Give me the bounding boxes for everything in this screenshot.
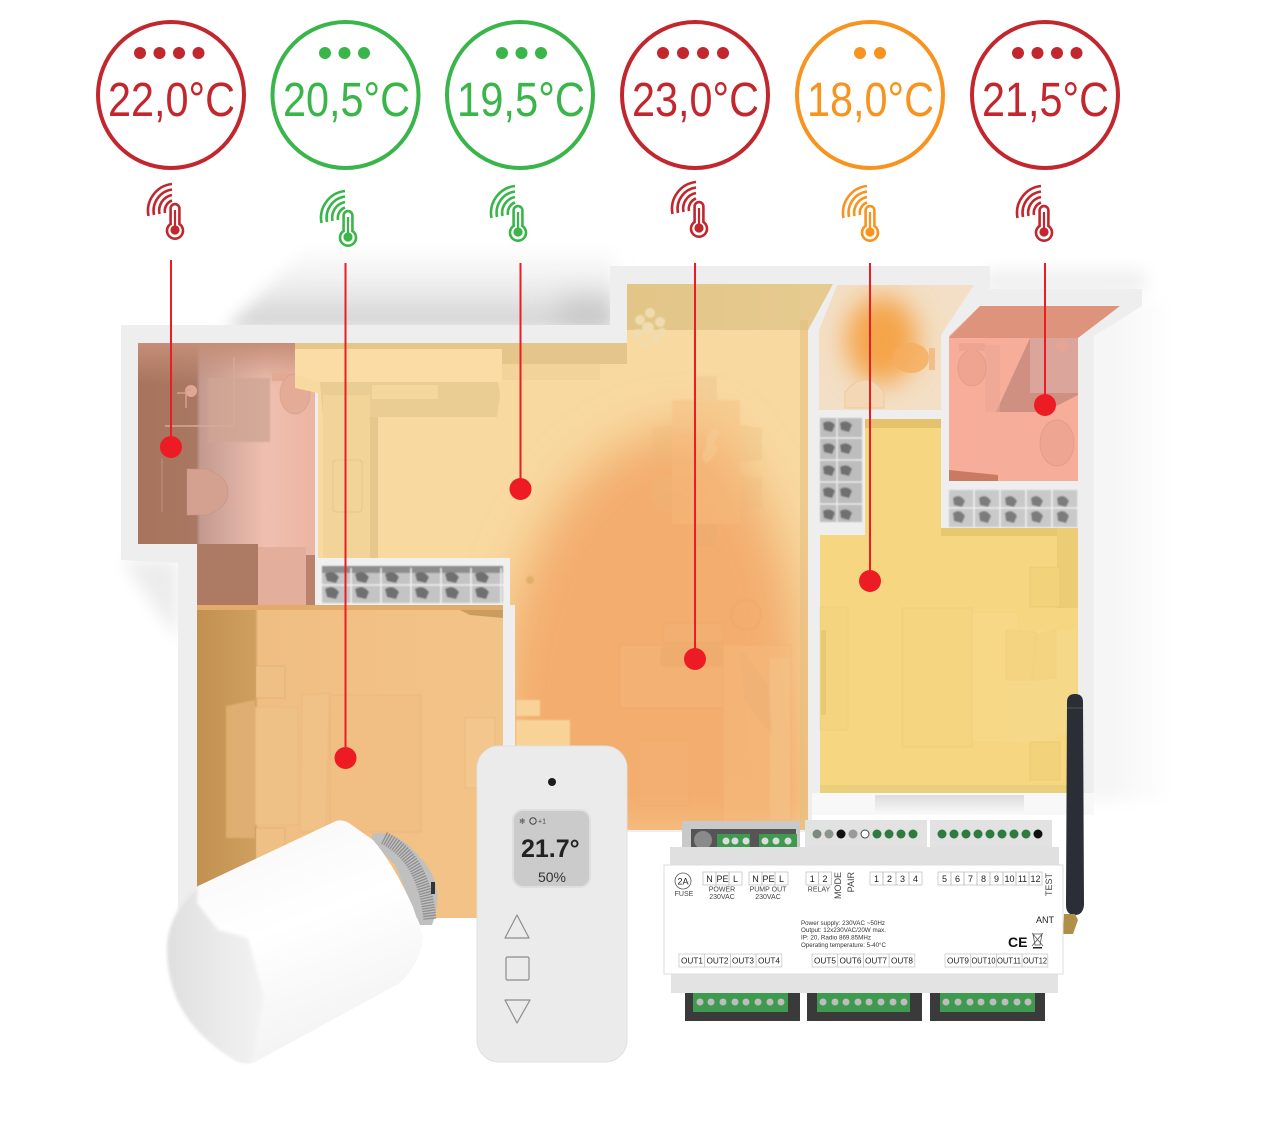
dining table [672, 376, 761, 464]
upper left terminals [682, 821, 800, 849]
ANT label and marks: ANT [1036, 915, 1055, 925]
room: wardrobe right [949, 490, 1078, 527]
ANT label and marks: CE [1008, 934, 1027, 950]
pointer line [684, 263, 706, 670]
indicator LEDs group 1 [805, 820, 927, 847]
power terminals: N [706, 874, 713, 884]
button: select [506, 957, 529, 980]
heat zone [495, 427, 815, 840]
front label plate [664, 865, 1063, 974]
temperature badge [447, 22, 593, 168]
power terminals: POWER [709, 886, 735, 894]
relay, mode, pair: PAIR [846, 872, 856, 892]
output terminals: OUT2 [706, 956, 729, 966]
output terminals: OUT6 [840, 956, 862, 966]
zone 3 reading [447, 22, 593, 500]
zone 2 reading [272, 22, 418, 769]
outer walls [121, 266, 1142, 918]
room: left bathroom [138, 343, 315, 605]
power terminals: 230VAC [709, 894, 735, 901]
button: up [505, 915, 529, 938]
output terminals: OUT7 [865, 956, 888, 966]
remote body [477, 746, 627, 1062]
power terminals: PE [716, 874, 729, 884]
plant [633, 308, 666, 349]
output terminals: OUT11 [997, 956, 1022, 966]
wiring controller [664, 694, 1084, 1021]
zone terminals: 12 [1030, 874, 1041, 884]
room: kitchen and living [295, 284, 833, 840]
zone terminals: 10 [1004, 874, 1015, 884]
display: +1 [538, 818, 546, 826]
temperature badge: 19,5°C [457, 74, 585, 127]
fuse label [675, 873, 694, 898]
building shadow [122, 245, 1175, 800]
zone terminals: 7 [968, 874, 973, 884]
pointer line [859, 263, 881, 592]
thermostat body [167, 820, 423, 1063]
bed [902, 608, 1076, 747]
thermostat end cap [167, 886, 264, 1063]
room: right bedroom [820, 419, 1078, 793]
icon: wireless thermometer [321, 191, 356, 246]
balcony threshold [812, 793, 1094, 815]
pump terminals: L [779, 874, 784, 884]
icon: wireless thermometer [843, 186, 878, 241]
zone terminals: 1 [874, 874, 879, 884]
output terminals [679, 954, 1048, 967]
zone terminals: 6 [955, 874, 960, 884]
zone terminals: 4 [913, 874, 918, 884]
zone terminals: 2 [887, 874, 892, 884]
zone terminals: 5 [942, 874, 947, 884]
specifications text [801, 921, 887, 949]
icon: wireless thermometer [1017, 186, 1052, 241]
display [513, 810, 590, 887]
pump terminals [749, 872, 788, 901]
output terminals: OUT12 [1023, 956, 1048, 966]
output terminals: OUT5 [814, 956, 837, 966]
pump terminals: N [752, 874, 759, 884]
output terminals: OUT4 [758, 956, 781, 966]
rug and sofa [526, 576, 791, 822]
power terminals [703, 872, 742, 901]
room: lower left bedroom [197, 605, 503, 918]
temperature badge: 23,0°C [632, 74, 759, 127]
temperature badge [622, 22, 768, 168]
zone 5 reading [797, 22, 943, 592]
kitchen counters [295, 349, 502, 364]
icon: wireless thermometer [491, 186, 526, 241]
output terminals: OUT9 [947, 956, 970, 966]
antenna [1063, 694, 1084, 934]
zone 4 reading [622, 22, 768, 670]
temperature badge [972, 22, 1118, 168]
pump terminals: PUMP OUT [750, 886, 787, 894]
relay, mode, pair: MODE [833, 872, 843, 899]
bed [226, 693, 421, 838]
housing rails [670, 847, 1059, 993]
wireless remote thermostat [477, 746, 627, 1062]
temperature badge: 18,0°C [807, 74, 934, 127]
specifications text: Operating temperature: 5-40°C [801, 943, 887, 949]
specifications text: IP: 20, Radio 869.85MHz [801, 936, 871, 942]
specifications text: Power supply: 230VAC ~50Hz [801, 921, 885, 927]
zone 6 reading [972, 22, 1118, 416]
zone terminals: TEST [1044, 873, 1054, 896]
LED [548, 778, 556, 786]
room: toilet [819, 285, 974, 410]
room: closet [820, 418, 862, 522]
zone terminals: 11 [1018, 874, 1027, 884]
zone 1 reading [98, 22, 244, 458]
output terminals: OUT3 [732, 956, 755, 966]
indicator LEDs group 2 [930, 820, 1052, 847]
pump terminals: PE [762, 874, 775, 884]
zone terminals: 9 [994, 874, 999, 884]
zone terminals: 3 [900, 874, 905, 884]
output terminals: OUT10 [972, 956, 996, 966]
fuse label: FUSE [675, 891, 694, 898]
icon: wireless thermometer [672, 182, 707, 237]
relay, mode, pair: 2 [822, 874, 828, 884]
temperature badge [98, 22, 244, 168]
relay, mode, pair: RELAY [808, 886, 831, 894]
ANT label and marks [1008, 915, 1055, 950]
relay, mode, pair: 1 [810, 874, 815, 884]
temperature badge [797, 22, 943, 168]
pump terminals: 230VAC [755, 894, 781, 901]
zone terminals [870, 872, 1054, 896]
temperature badge: 20,5°C [283, 74, 410, 127]
specifications text: Output: 12x230VAC/20W max. [801, 928, 886, 934]
display: 50% [538, 869, 566, 885]
knurled ring [372, 833, 437, 925]
output terminals: OUT8 [891, 956, 914, 966]
fuse label: 2A [677, 876, 689, 886]
power terminals: L [733, 874, 738, 884]
pointer line [510, 263, 532, 500]
room: right bathroom [949, 306, 1120, 481]
temperature badge [272, 22, 418, 168]
pointer line [1034, 263, 1056, 416]
radiator thermostat head [167, 820, 437, 1063]
floor plan [121, 245, 1175, 918]
display: ❄ [519, 817, 526, 826]
temperature badge: 21,5°C [982, 74, 1109, 127]
zone terminals: 8 [981, 874, 986, 884]
room: wardrobe left [318, 558, 510, 605]
icon: wireless thermometer [148, 184, 183, 239]
lower terminals [685, 993, 1045, 1021]
display: 21.7° [521, 835, 580, 863]
pointer line [160, 260, 182, 458]
button: down [505, 1000, 530, 1023]
output terminals: OUT1 [681, 956, 704, 966]
temperature badge: 22,0°C [108, 74, 235, 127]
relay, mode, pair [806, 872, 856, 899]
pointer line [334, 263, 356, 769]
